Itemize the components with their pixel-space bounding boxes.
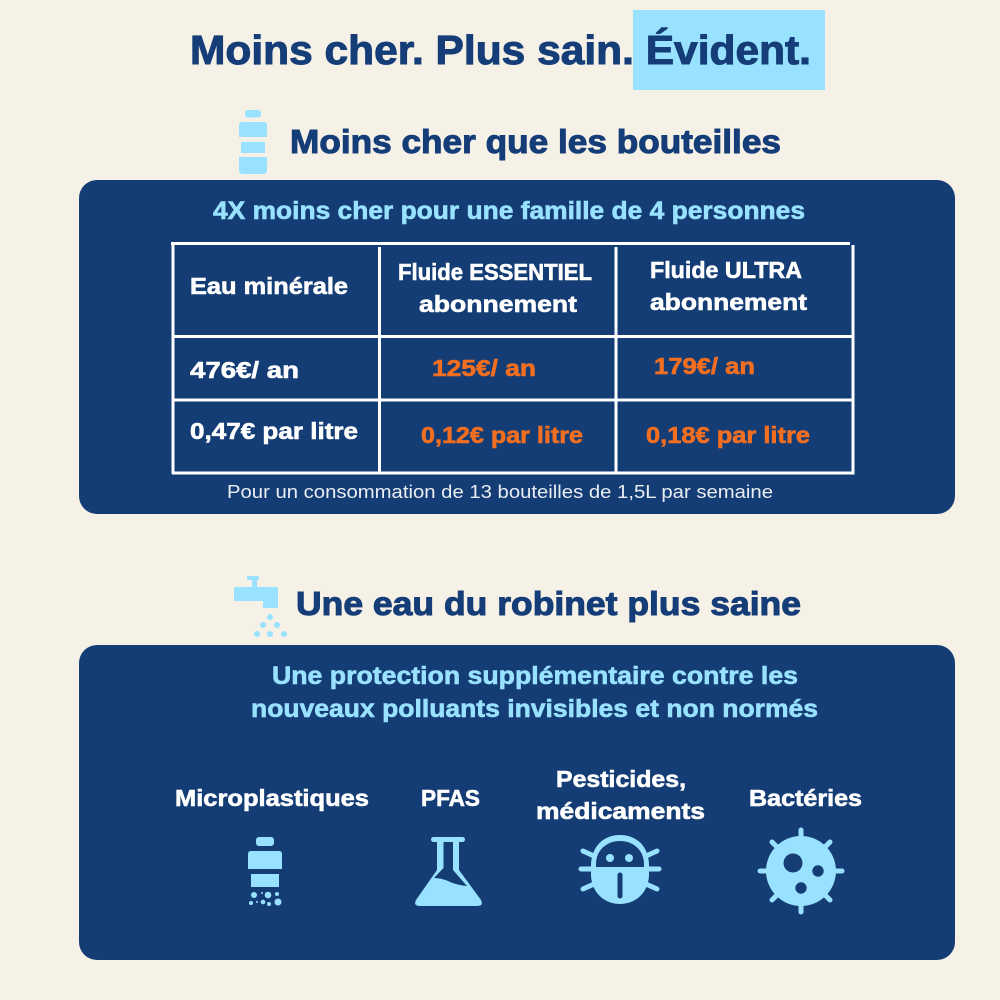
icon: bug [581,835,659,904]
icon: microplastics bottle [248,837,282,906]
footnote: Pour un consommation de 13 bouteilles de 1,5L par semaine [227,481,773,502]
litre price: Ultra: 0,18€ par litre [646,422,810,448]
label: microplastics: Microplastiques [175,785,369,811]
header: Fluide Essentiel: abonnement [419,291,577,317]
header: Fluide Essentiel: Fluide ESSENTIEL [398,259,592,285]
title text: Moins cher. Plus sain. Évident. [190,27,811,73]
litre price: Essentiel: 0,12€ par litre [421,422,583,448]
yearly price: Essentiel: 125€/ an [432,355,536,381]
litre price: mineral water: 0,47€ par litre [190,418,358,444]
table grid [171,243,854,474]
icon: flask [415,837,482,906]
icon: bacterium [760,830,842,912]
heading: cheaper than bottles: Moins cher que les bouteilles [290,123,781,160]
panel intro text: Une protection supplémentaire contre les [272,662,798,690]
icon: water bottle [239,110,267,174]
header: Fluide Essentiel [398,259,592,317]
yearly price: mineral water: 476€/ an [190,357,299,383]
title [190,10,825,90]
panel: pollutants [79,645,955,960]
comparison table [171,243,854,474]
header: mineral water: Eau minérale [190,273,348,299]
header: Fluide Ultra: Fluide ULTRA [650,257,802,283]
panel intro text [251,662,818,723]
heading: healthier tap water: Une eau du robinet plus saine [296,585,801,622]
label: pesticides and medicines: Pesticides, [556,766,686,792]
header: Fluide Ultra: abonnement [650,289,807,315]
label: pesticides and medicines: médicaments [536,798,705,824]
yearly price: Ultra: 179€/ an [654,353,755,379]
label: pesticides and medicines [536,766,705,824]
header: Fluide Ultra [650,257,807,315]
panel intro text: nouveaux polluants invisibles et non normés [251,695,818,723]
label: PFAS: PFAS [421,785,480,811]
icon: faucet [234,576,287,637]
panel: price comparison [79,180,955,514]
title highlight [633,10,825,90]
label: bacteria: Bactéries [749,785,862,811]
panel heading: 4X moins cher pour une famille de 4 personnes [213,197,805,225]
